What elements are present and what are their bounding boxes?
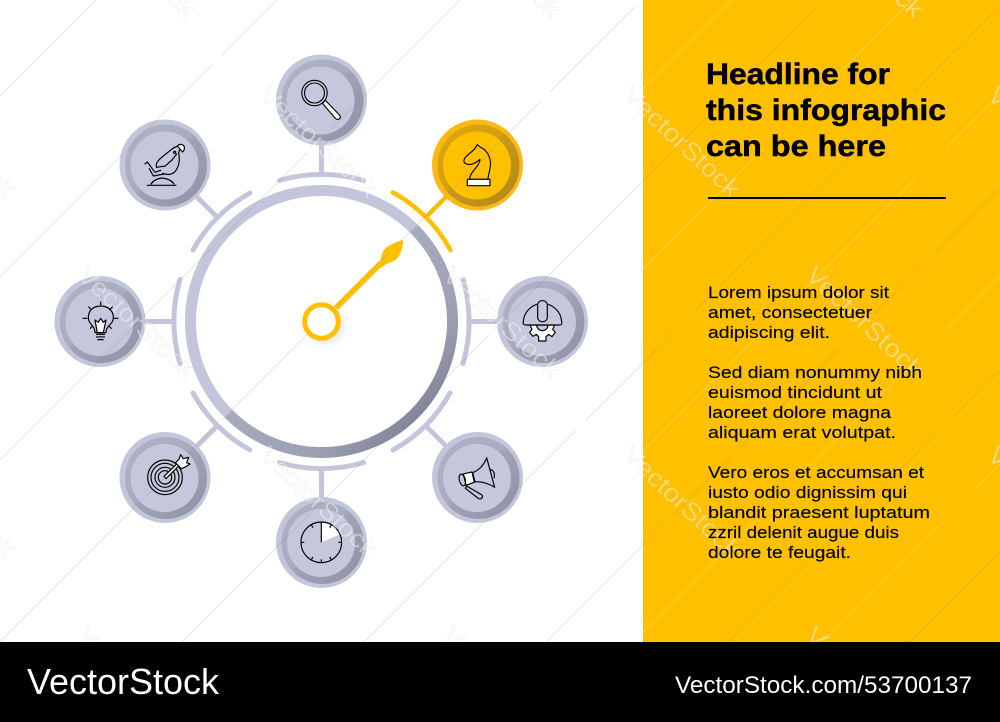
node: search — [276, 54, 367, 146]
text block: second paragraph: Sed diam nonummy nibh — [708, 363, 922, 382]
watermarks: VectorStock — [800, 261, 929, 384]
panel: white background — [0, 0, 643, 642]
text block: third paragraph: iusto odio dignissim qui — [708, 483, 907, 502]
highlighted arc and connector — [393, 192, 450, 250]
watermarks: VectorStock — [72, 261, 201, 384]
watermarks: VectorStock — [254, 81, 383, 204]
needle — [305, 240, 403, 344]
text block: first paragraph: adipiscing elit. — [708, 323, 830, 342]
footer logo text: VectorStock — [27, 661, 220, 702]
footer image id: VectorStock.com/53700137 — [675, 672, 972, 699]
connectors and arcs around the dial — [145, 146, 498, 497]
text block: third paragraph: Vero eros et accumsan et — [708, 463, 924, 482]
watermarks: VectorStock — [617, 441, 746, 564]
heading divider — [708, 197, 946, 199]
text block: first paragraph — [708, 283, 889, 342]
node: light bulb — [54, 276, 146, 367]
text block: third paragraph: dolore te feugait. — [708, 543, 851, 562]
heading: this infographic — [706, 94, 946, 127]
watermarks: VectorStock — [254, 441, 383, 564]
text block: third paragraph: zzril delenit augue duis — [708, 523, 899, 542]
text block: second paragraph — [708, 363, 922, 442]
node: chess knight (highlighted) — [432, 120, 523, 210]
icon: clock — [301, 522, 342, 563]
text block: third paragraph: blandit praesent luptatum — [708, 503, 930, 522]
node: construction helmet — [497, 276, 588, 367]
heading — [706, 58, 946, 163]
watermarks: VectorStock — [617, 81, 746, 204]
watermarks: VectorStock — [437, 261, 566, 384]
icon: chess knight — [464, 145, 490, 186]
dial: central ring — [190, 190, 452, 452]
text block: third paragraph — [708, 463, 930, 562]
icon: megaphone — [458, 458, 495, 499]
heading: Headline for — [706, 58, 890, 91]
node: megaphone — [432, 432, 523, 523]
icon: light bulb — [83, 302, 118, 340]
icon: target with arrow — [148, 455, 190, 495]
node: microscope — [120, 120, 210, 210]
node: clock — [276, 497, 367, 588]
panel: yellow side panel — [643, 0, 1000, 642]
footer bar — [0, 642, 1000, 722]
icon: microscope — [145, 144, 184, 185]
node: target — [120, 432, 210, 523]
text block: first paragraph: amet, consectetuer — [708, 303, 872, 322]
text block: second paragraph: aliquam erat volutpat. — [708, 423, 896, 442]
text block: second paragraph: euismod tincidunt ut — [708, 383, 882, 402]
heading: can be here — [706, 130, 886, 163]
text block: first paragraph: Lorem ipsum dolor sit — [708, 283, 889, 302]
text block: second paragraph: laoreet dolore magna — [708, 403, 892, 422]
icon: helmet and gear — [523, 301, 562, 341]
icon: magnifying glass — [302, 80, 340, 119]
